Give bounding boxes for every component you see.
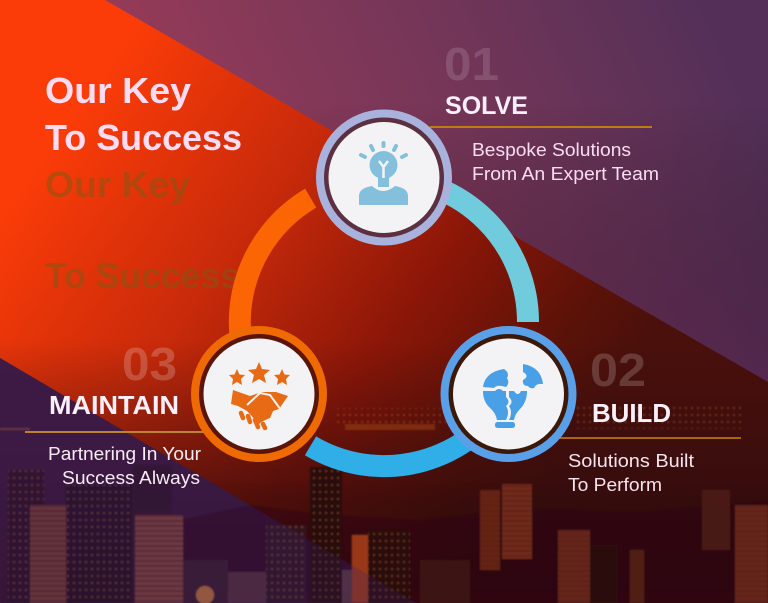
step 3 heading: MAINTAIN [49, 390, 179, 420]
step 1 text [444, 38, 659, 184]
background: lower-left purple triangle [0, 358, 416, 603]
purple tint over city [0, 358, 416, 603]
node 2 ring [444, 330, 572, 458]
icon: handshake with stars [229, 362, 290, 428]
node 1 ring [320, 114, 448, 242]
step 2 divider [545, 437, 741, 439]
node 2 disc [453, 338, 564, 450]
step 1 heading: SOLVE [445, 92, 528, 120]
city skyline photo [0, 405, 768, 603]
node 3 ring [195, 330, 323, 458]
ghost title echo: Our Key [45, 164, 190, 205]
step 1 divider [430, 126, 652, 128]
background: lower dusk shading [0, 322, 768, 603]
icon: lightbulb head person [359, 143, 408, 205]
step 3 description [48, 443, 201, 488]
step 3 number: 03 [122, 338, 177, 390]
cycle arc: blue [310, 394, 509, 466]
step 1 description [472, 139, 659, 184]
step 2 text [568, 344, 694, 495]
title [45, 70, 242, 158]
step 1 description: From An Expert Team [472, 163, 659, 184]
step 2 description: Solutions Built [568, 450, 694, 471]
cycle arc: teal [384, 178, 528, 322]
node 3 disc [204, 338, 314, 450]
ghost title echo: To Success [45, 255, 240, 296]
step 3 divider [25, 431, 205, 433]
step 1 number: 01 [444, 38, 499, 90]
step 3 text [48, 338, 201, 488]
icon: puzzle lightbulb [483, 364, 543, 428]
step 1 description: Bespoke Solutions [472, 139, 631, 160]
title: Our Key [45, 70, 191, 111]
title: To Success [45, 117, 242, 158]
step 2 description: To Perform [568, 474, 662, 495]
step 2 description [568, 450, 694, 495]
node 3: maintain [195, 330, 323, 458]
node 1 disc [328, 122, 440, 233]
node 1: solve [320, 114, 448, 242]
step 2 number: 02 [590, 344, 646, 396]
cycle arc: orange [240, 198, 311, 394]
step 3 description: Success Always [62, 467, 200, 488]
ghost title echo [45, 164, 240, 296]
step 2 heading: BUILD [592, 398, 671, 428]
step 3 description: Partnering In Your [48, 443, 201, 464]
node 2: build [444, 330, 572, 458]
